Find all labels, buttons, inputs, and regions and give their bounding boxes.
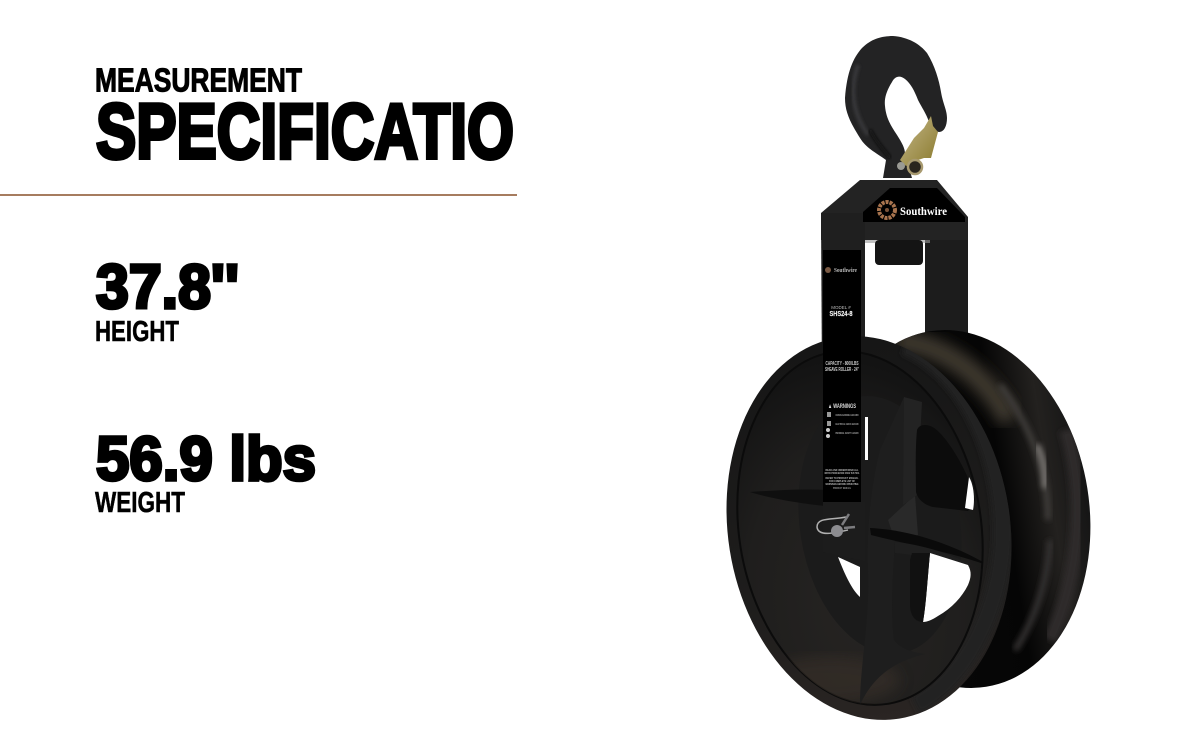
bracket brand label: Southwire (900, 204, 948, 218)
stat: weight value: 56.9 lbs (96, 425, 316, 494)
strap label: READ AND UNDERSTAND ALL (826, 468, 859, 472)
front strap (821, 213, 865, 561)
spoke openings (916, 425, 975, 511)
wheel hub (813, 542, 907, 646)
strap label: SHEAVE ROLLER - 24" (825, 367, 859, 373)
strap label: CAPACITY - 8000LBS (826, 361, 859, 367)
strap label: OVERLOADING HAZARD (836, 413, 859, 417)
strap label (823, 250, 861, 502)
strap label: FOR COMPLETE LIST OF (829, 479, 855, 483)
hanger bracket (821, 180, 968, 240)
strap label: PRODUCT MANUAL (833, 486, 851, 490)
divider rule (0, 194, 517, 196)
strap label: ELECTRICAL SHOCK HAZARD (836, 422, 859, 426)
subtitle: measurement: MEASUREMENT (95, 62, 302, 98)
strap label: MODEL # (831, 305, 851, 310)
bracket brand label (863, 188, 965, 222)
rear tyre (895, 330, 1090, 688)
stat: weight label: WEIGHT (95, 487, 185, 519)
title: specification: SPECIFICATIO (96, 87, 514, 175)
strap label: ▲ WARNINGS (828, 403, 856, 410)
retaining pin (817, 514, 855, 537)
hook (845, 36, 947, 178)
horizontal spokes (751, 490, 823, 506)
hook safety latch (897, 116, 938, 174)
front wheel (726, 336, 1012, 720)
stat: height label: HEIGHT (95, 316, 179, 348)
rear strap (925, 225, 968, 355)
strap label: WARNINGS BEFORE OPERATING (826, 482, 859, 486)
product: sheave pulley (726, 36, 1090, 720)
strap label: PERSONAL SAFETY HAZARD (836, 431, 859, 435)
strap label: REFER TO PRODUCT MANUAL (826, 476, 859, 480)
strap label: INSTRUCTIONS BEFORE USING THIS TOOL (824, 471, 860, 475)
strap label: Southwire (834, 268, 857, 274)
lower strap (823, 502, 865, 561)
stat: height value: 37.8'' (96, 253, 239, 322)
vertical spoke (860, 398, 904, 704)
strap label: SHS24-8 (830, 311, 853, 318)
bearing housing (858, 240, 930, 265)
